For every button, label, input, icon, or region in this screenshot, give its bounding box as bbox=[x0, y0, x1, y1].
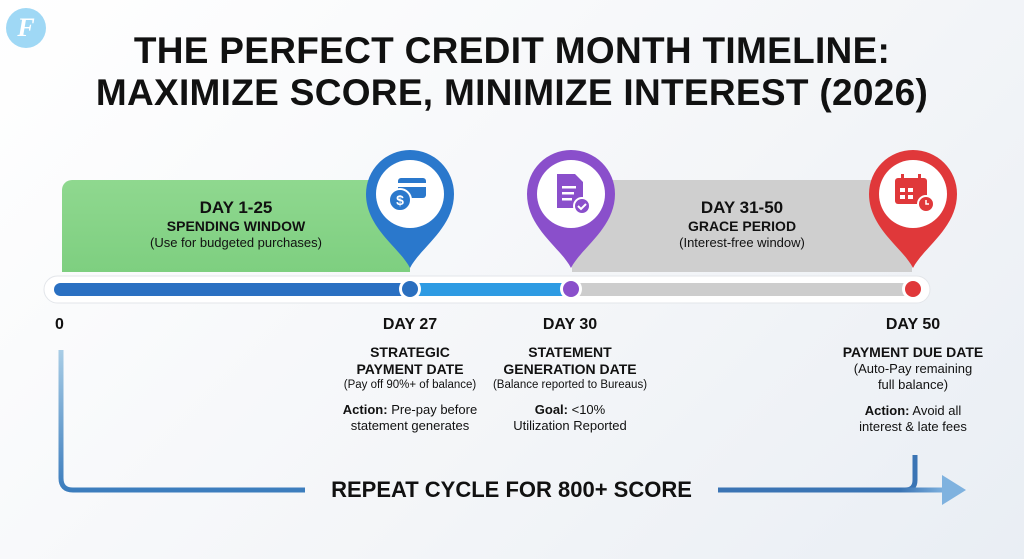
text block: day 50: interest & late fees bbox=[859, 419, 967, 434]
text block: day 30: Goal: <10% bbox=[535, 402, 605, 417]
text block: day 30: DAY 30 bbox=[543, 316, 597, 333]
text block: day 30: GENERATION DATE bbox=[503, 361, 637, 377]
text block: day 50: PAYMENT DUE DATE bbox=[843, 344, 983, 360]
text block: day 27: statement generates bbox=[351, 418, 469, 433]
text block: day 27: DAY 27 bbox=[383, 316, 437, 333]
logo: F bbox=[17, 13, 35, 42]
text block: day 27: Action: Pre-pay before bbox=[343, 402, 477, 417]
title: MAXIMIZE SCORE, MINIMIZE INTEREST (2026) bbox=[96, 72, 928, 113]
panel: grace period: DAY 31-50 bbox=[701, 198, 783, 217]
text block: day 27 bbox=[343, 316, 477, 433]
panel: spending window: SPENDING WINDOW bbox=[167, 218, 305, 234]
callout: repeat cycle text: REPEAT CYCLE FOR 800+ SCORE bbox=[331, 477, 692, 502]
text block: day 50: DAY 50 bbox=[886, 316, 940, 333]
text block: day 50 bbox=[843, 316, 983, 434]
logo bbox=[6, 8, 46, 48]
icon: purple pin document bbox=[527, 150, 615, 268]
icon: blue pin credit card bbox=[366, 150, 454, 268]
text block: day 27: PAYMENT DATE bbox=[356, 361, 464, 377]
text block: day 27: (Pay off 90%+ of balance) bbox=[344, 379, 476, 391]
panel: grace period: (Interest-free window) bbox=[679, 235, 805, 250]
panel: grace period: GRACE PERIOD bbox=[688, 218, 796, 234]
icon: red pin calendar bbox=[869, 150, 957, 268]
text block: day 50: Action: Avoid all bbox=[865, 403, 961, 418]
text block: day 30 bbox=[493, 316, 647, 433]
label: day 0: 0 bbox=[55, 316, 64, 333]
panel: grace period bbox=[572, 180, 912, 272]
text block: day 50: (Auto-Pay remaining bbox=[854, 361, 972, 376]
text block: day 30: STATEMENT bbox=[528, 344, 612, 360]
text block: day 27: STRATEGIC bbox=[370, 344, 450, 360]
panel: spending window: DAY 1-25 bbox=[200, 198, 272, 217]
text block: day 30: Utilization Reported bbox=[513, 418, 627, 433]
text block: day 30: (Balance reported to Bureaus) bbox=[493, 379, 647, 391]
panel: spending window bbox=[62, 180, 410, 272]
title bbox=[96, 30, 928, 113]
title: THE PERFECT CREDIT MONTH TIMELINE: bbox=[134, 30, 890, 71]
text block: day 50: full balance) bbox=[878, 377, 948, 392]
panel: spending window: (Use for budgeted purchases) bbox=[150, 235, 322, 250]
icon: blue pin credit card: $ bbox=[396, 192, 404, 208]
